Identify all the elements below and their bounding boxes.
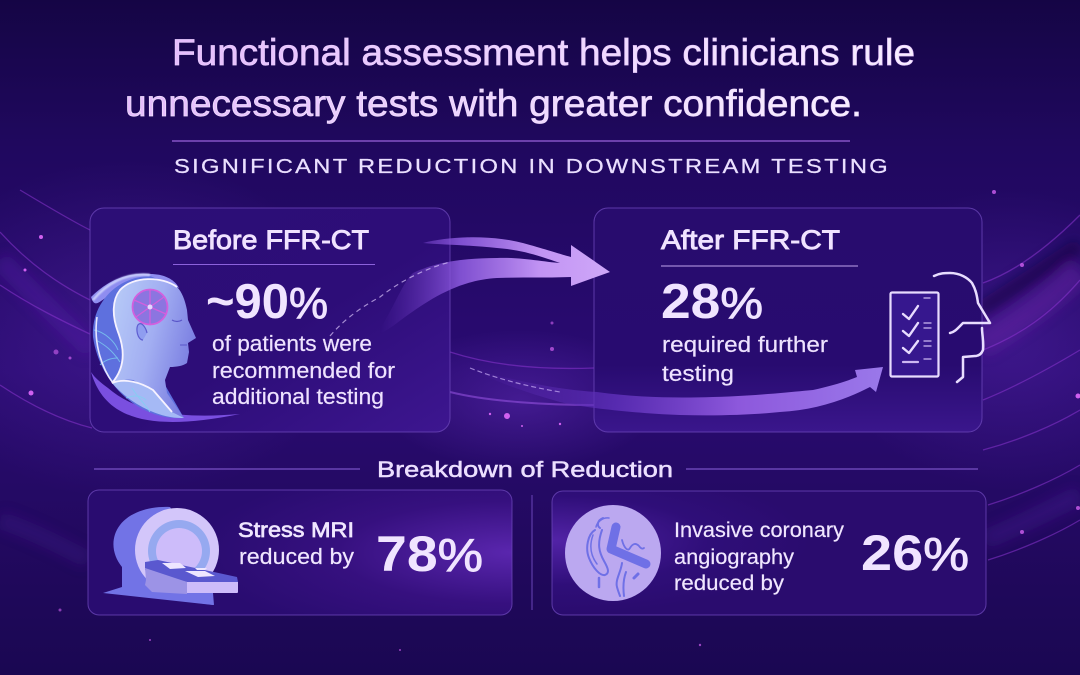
text: angiography: angiography bbox=[674, 545, 794, 569]
arrow: to checklist bbox=[470, 367, 883, 415]
icon: coronary circle bbox=[565, 505, 661, 601]
stat: 26 percent: 26% bbox=[861, 525, 969, 581]
text: angiography bbox=[674, 518, 844, 595]
text: angiography: Invasive coronary bbox=[674, 518, 844, 542]
arrow: before to after bbox=[330, 237, 610, 338]
text: angiography: reduced by bbox=[674, 571, 784, 595]
icon: human head with brain bbox=[91, 274, 240, 422]
stat: 28 percent: 28% bbox=[661, 275, 763, 329]
stat: 90 percent: ~90% bbox=[206, 275, 328, 329]
panel: invasive coronary angiography bbox=[552, 491, 986, 615]
text: stress MRI: reduced by bbox=[239, 544, 354, 569]
panel: before FFR-CT bbox=[90, 208, 450, 432]
panel: after FFR-CT bbox=[594, 208, 982, 432]
heading: after: After FFR-CT bbox=[661, 225, 840, 255]
title: unnecessary tests with greater confidence. bbox=[125, 82, 862, 124]
stat: 78 percent: 78% bbox=[376, 526, 483, 582]
title: Functional assessment helps clinicians rule bbox=[172, 31, 915, 73]
text: after description bbox=[662, 332, 829, 386]
text: after description: required further bbox=[662, 332, 829, 357]
title bbox=[125, 31, 915, 124]
text: before description: recommended for bbox=[212, 358, 395, 383]
text: stress MRI bbox=[238, 518, 354, 569]
text: before description: additional testing bbox=[212, 384, 384, 409]
text: before description bbox=[212, 331, 395, 409]
subtitle: SIGNIFICANT REDUCTION IN DOWNSTREAM TESTING bbox=[174, 155, 890, 178]
icon: MRI scanner bbox=[103, 507, 238, 605]
icon: checklist and head bbox=[890, 273, 990, 382]
text: before description: of patients were bbox=[212, 331, 372, 356]
text: stress MRI: Stress MRI bbox=[238, 518, 354, 542]
section heading: breakdown of reduction: Breakdown of Reduction bbox=[377, 457, 673, 482]
panel: stress MRI bbox=[88, 490, 512, 615]
text: after description: testing bbox=[662, 361, 734, 386]
heading: before: Before FFR-CT bbox=[173, 225, 369, 255]
